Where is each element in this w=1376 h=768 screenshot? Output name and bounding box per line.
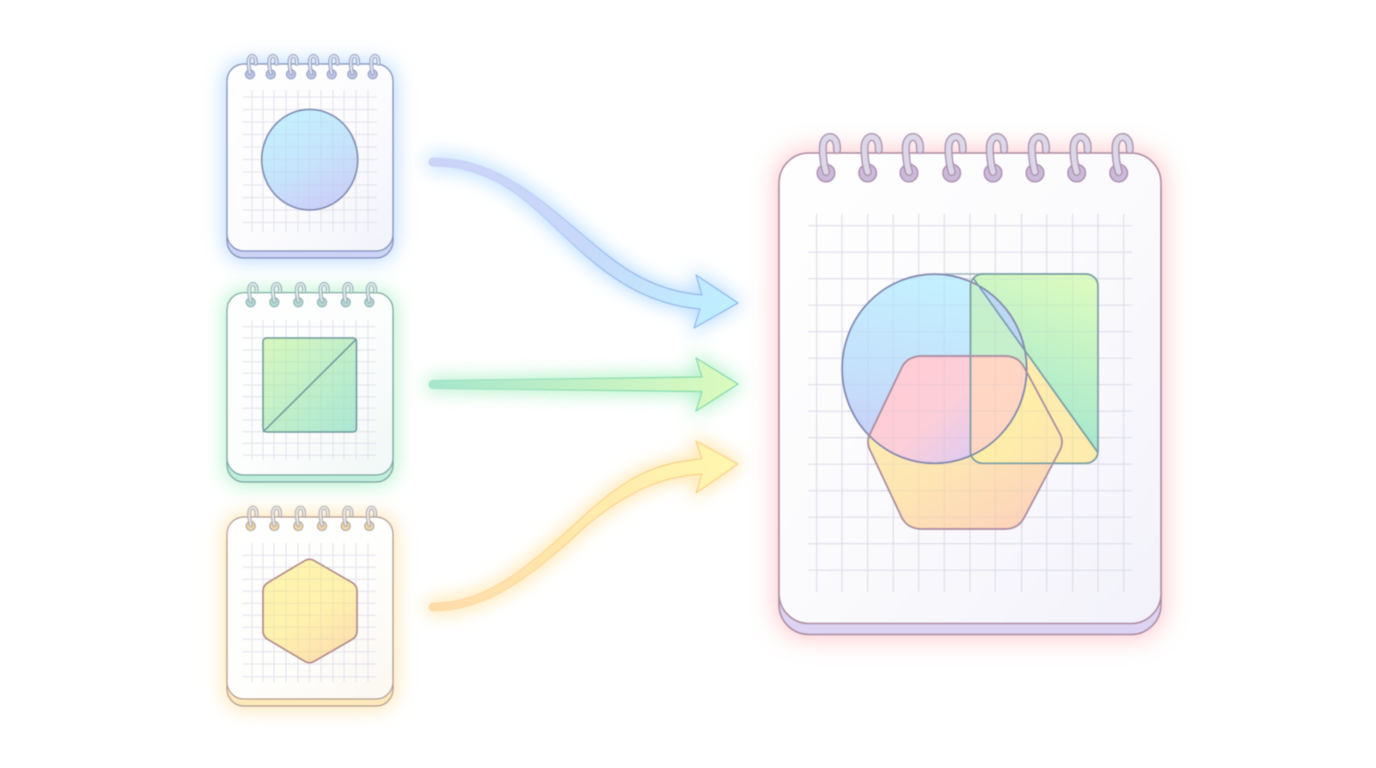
icon: circle shape: [262, 109, 358, 210]
icon: hexagon shape: [263, 559, 357, 663]
spiral rings: [246, 284, 375, 307]
overlapping shapes: circle, square, hexagon: [842, 274, 1098, 529]
notebook: blue circle: [225, 56, 395, 260]
icon: square split by diagonal: [263, 338, 356, 432]
notebook: yellow hexagon: [225, 508, 395, 708]
spiral rings: [817, 137, 1130, 182]
spiral rings: [245, 56, 378, 79]
notebook: green square: [225, 284, 395, 484]
arrow: yellow: [429, 441, 738, 611]
notebook: combined result: [777, 137, 1163, 637]
arrow: blue: [429, 158, 738, 328]
arrow: green: [429, 358, 738, 411]
spiral rings: [246, 508, 375, 531]
